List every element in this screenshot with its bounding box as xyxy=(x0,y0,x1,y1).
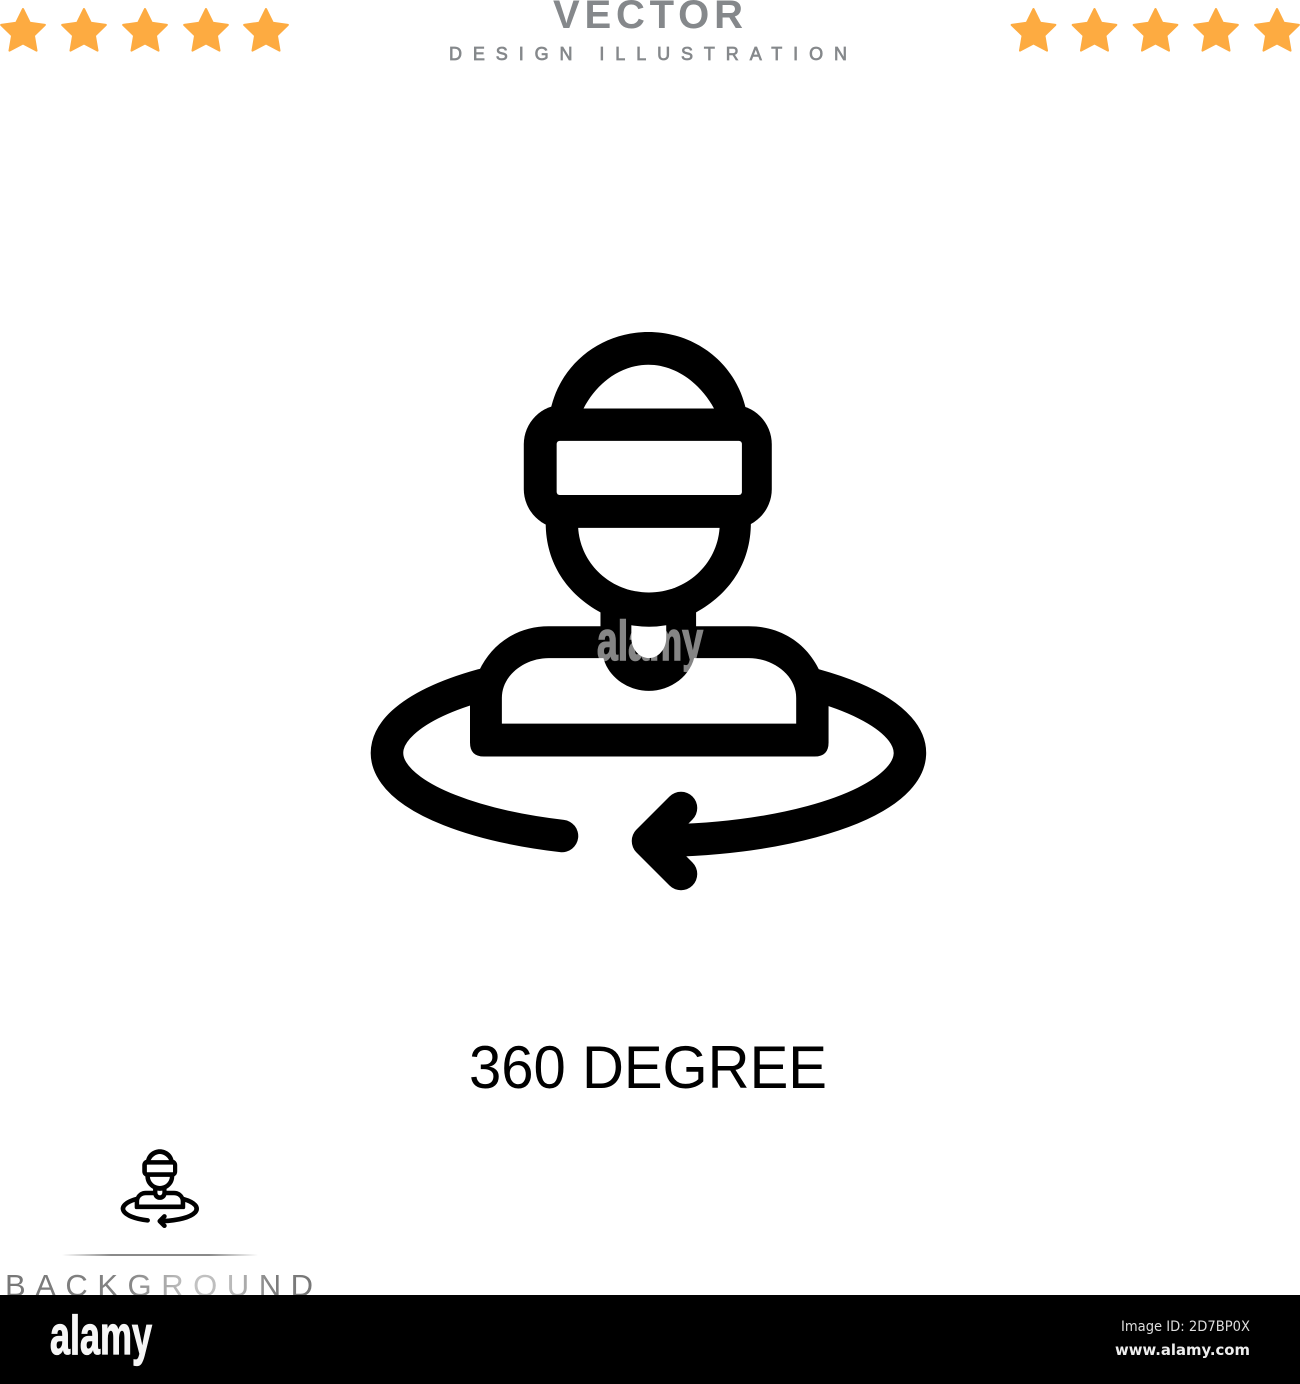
rotation arc left xyxy=(387,685,562,836)
left rating stars xyxy=(1,9,288,51)
body opening xyxy=(502,658,796,724)
footer logo: alamy: alamy xyxy=(50,1304,152,1366)
footer background xyxy=(0,1295,1300,1384)
watermark text over icon: alamy xyxy=(597,609,703,672)
face opening xyxy=(578,528,720,592)
collar xyxy=(602,653,695,691)
rotation arc right xyxy=(670,685,910,841)
caption: BACKGROUND: BACKGROUND xyxy=(5,1268,313,1303)
website: www.alamy.com xyxy=(1115,1341,1250,1359)
right rating stars xyxy=(1012,9,1299,51)
cap opening xyxy=(584,365,714,409)
VR visor frame xyxy=(524,405,772,529)
lower face and neck xyxy=(546,523,751,638)
header subtitle: DESIGN ILLUSTRATION: DESIGN ILLUSTRATION xyxy=(449,44,847,64)
small icon thumbnail xyxy=(123,1149,197,1226)
collar opening xyxy=(631,625,666,658)
head cap xyxy=(550,332,747,415)
person figure xyxy=(470,332,829,756)
footer bar xyxy=(0,1295,1300,1384)
main label: 360 DEGREE: 360 DEGREE xyxy=(469,1034,827,1101)
shoulders body xyxy=(470,626,829,756)
image id: Image ID: 2D7BP0X xyxy=(1121,1319,1250,1335)
visor opening xyxy=(557,441,742,495)
icon: VR headset person with 360 degree arrow xyxy=(387,332,910,874)
arrow head xyxy=(648,808,681,874)
